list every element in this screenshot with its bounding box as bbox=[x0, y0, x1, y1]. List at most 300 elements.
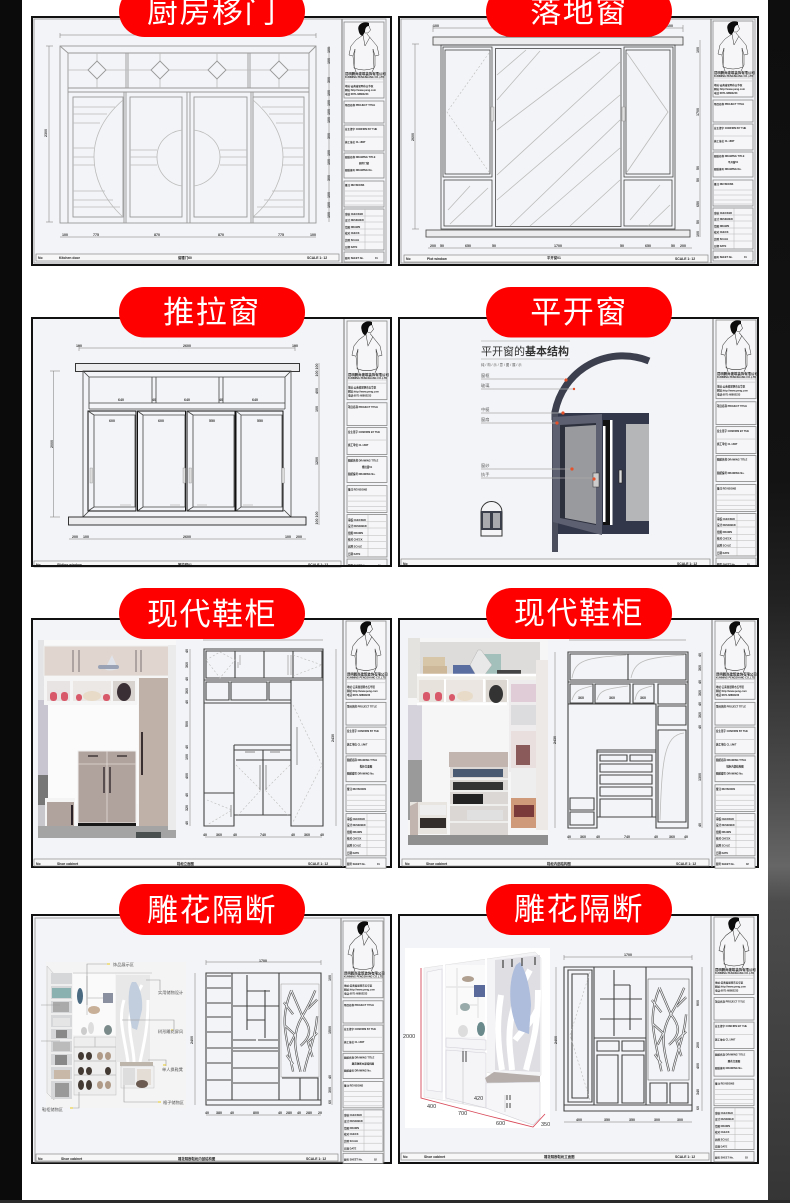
drawing footer text: 鞋柜内部结构图 bbox=[547, 861, 571, 866]
elevation drawing: shoe cabinet: 360 bbox=[185, 662, 189, 668]
title block: 电话:0871-68882233 bbox=[717, 393, 741, 397]
interior drawing: partition: 40 bbox=[230, 1111, 234, 1115]
title block: 设计 DESIGNED bbox=[715, 1117, 734, 1121]
part labels with leader lines: 窗扇 bbox=[481, 416, 489, 423]
elevation drawing: sliding door: 100 bbox=[62, 233, 68, 237]
elevation drawing: window: 2600 bbox=[411, 133, 415, 141]
elevation drawing: sliding window: 1200 bbox=[315, 457, 319, 465]
drawing footer text: Kitchen door bbox=[59, 256, 81, 260]
elevation drawing: window: 100 bbox=[667, 24, 673, 28]
title block: KUNMING PENGSHANG CO.,LTD bbox=[714, 75, 753, 78]
elevation drawing: window: 100 bbox=[696, 231, 700, 237]
elevation drawing: shoe cabinet: 740 bbox=[260, 833, 266, 837]
title block: 网址:http://www.peng.com bbox=[348, 389, 380, 393]
product photo with dimensions: 350 bbox=[541, 1122, 550, 1128]
drawing footer text bbox=[36, 861, 328, 866]
title block: 雕花立面图 bbox=[728, 1059, 741, 1063]
elevation drawing: sliding door bbox=[44, 33, 331, 237]
title block: 校对 CHECK bbox=[344, 1132, 359, 1136]
title block: 图纸名称 DRAWING TITLE bbox=[717, 458, 748, 462]
elevation drawing: sliding window: 100 bbox=[76, 344, 82, 348]
title block bbox=[713, 21, 755, 261]
interior drawing: partition: 380 bbox=[216, 1111, 222, 1115]
title block: 图纸名称 DRAWING TITLE bbox=[345, 155, 376, 159]
elevation drawing: sliding door: 775 bbox=[278, 233, 284, 237]
elevation drawing: shoe cabinet: 500 bbox=[185, 721, 189, 727]
photo: open shoe cabinet bbox=[408, 638, 548, 845]
elevation drawing: sliding door: 100 bbox=[327, 100, 331, 106]
title block: 比例 SCALE bbox=[717, 544, 731, 548]
part labels with leader lines bbox=[481, 372, 596, 481]
elevation drawing: window: 50 bbox=[620, 244, 624, 248]
elevation drawing: window: 50 bbox=[696, 166, 700, 170]
title block: 业主签字 CONFIRM BY THE bbox=[714, 126, 747, 130]
interior drawing: shoe cabinet: 360 bbox=[698, 690, 702, 696]
title block: 图纸名称 DRAWING TITLE bbox=[344, 1055, 375, 1059]
title block: 施工单位 CL.UNIT bbox=[717, 442, 738, 446]
elevation drawing: sliding door: 100 bbox=[327, 109, 331, 115]
interior drawing: shoe cabinet: 40 bbox=[698, 653, 702, 657]
title block: 绘图 DRAWN bbox=[717, 530, 732, 534]
elevation drawing: partition: 300 bbox=[677, 1118, 683, 1122]
title block: 图纸编号 DRAWING No. bbox=[344, 1068, 372, 1072]
drawing footer text: SCALE 1: 12 bbox=[677, 562, 697, 566]
elevation drawing: shoe cabinet: 40 bbox=[185, 649, 189, 653]
elevation drawing: window: 100 bbox=[433, 24, 439, 28]
elevation drawing: sliding door: 100 bbox=[310, 233, 316, 237]
title block: 鞋柜立面图 bbox=[360, 764, 373, 768]
elevation drawing: sliding window: 2600 bbox=[183, 344, 191, 348]
title block: 图纸编号 DRAWING No. bbox=[716, 771, 744, 775]
elevation drawing: shoe cabinet: 360 bbox=[185, 688, 189, 694]
elevation drawing: sliding door: 775 bbox=[93, 233, 99, 237]
title block: 业主签字 CONFIRM BY THE bbox=[345, 127, 378, 131]
elevation drawing: partition: 300 bbox=[654, 1118, 660, 1122]
elevation drawing: sliding window: 100 bbox=[285, 535, 291, 539]
interior drawing: shoe cabinet: 360 bbox=[580, 835, 586, 839]
title block: 项目名称 PROJECT TITLE bbox=[345, 103, 375, 107]
title block: 01 bbox=[744, 256, 747, 259]
drawing footer text: 窗腰门60 bbox=[178, 255, 192, 260]
right dark gradient strip bbox=[768, 0, 790, 1203]
drawing footer text: 鞋柜立面图 bbox=[177, 861, 195, 866]
interior drawing: partition: 40 bbox=[205, 1111, 209, 1115]
elevation drawing: sliding door: 100 bbox=[327, 90, 331, 96]
title block: 备注 REVISIONS bbox=[347, 787, 366, 791]
elevation drawing: window: 50 bbox=[696, 178, 700, 182]
title block: 平开窗01 bbox=[728, 160, 739, 164]
title block: 网址:http://www.peng.com bbox=[716, 689, 747, 693]
feature callouts: 饰品展示区 bbox=[113, 961, 134, 968]
elevation drawing: window: 200 bbox=[680, 244, 686, 248]
elevation drawing: window: 1700 bbox=[696, 108, 700, 116]
heading pill: 平开窗 bbox=[486, 287, 672, 338]
title block: 01 bbox=[378, 564, 381, 567]
product photo with dimensions: 420 bbox=[474, 1096, 483, 1102]
elevation drawing: shoe cabinet: 2430 bbox=[331, 734, 335, 742]
elevation drawing: sliding window: 100 bbox=[292, 344, 298, 348]
elevation drawing: sliding window: 100 100 bbox=[315, 364, 319, 376]
product photo with dimensions: 700 bbox=[458, 1111, 467, 1117]
drawing footer text: No bbox=[38, 1157, 43, 1161]
title block: 校对 CHECK bbox=[348, 537, 363, 541]
title block: 审核 CHECKED bbox=[715, 1111, 733, 1115]
elevation drawing: sliding door: 100 bbox=[327, 202, 331, 208]
title block: 项目名称 PROJECT TITLE bbox=[347, 704, 377, 709]
panel: casement window bbox=[399, 318, 758, 568]
title block: 设计 DESIGNED bbox=[716, 823, 735, 827]
title block: 厨房门窗 bbox=[359, 161, 369, 165]
interior drawing: shoe cabinet: 40 bbox=[684, 835, 688, 839]
drawing footer text: No bbox=[405, 862, 410, 866]
interior drawing: shoe cabinet bbox=[553, 640, 702, 839]
part labels with leader lines: 玻璃 bbox=[481, 382, 489, 389]
elevation drawing: shoe cabinet: 320 bbox=[185, 805, 189, 811]
title block: 施工单位 CL.UNIT bbox=[714, 139, 735, 143]
drawing footer text: 推拉窗01 bbox=[178, 562, 192, 567]
title block: 图纸名称 DRAWING TITLE bbox=[715, 1053, 746, 1057]
elevation drawing: shoe cabinet: 40 bbox=[185, 793, 189, 797]
title block: 图号 SHEET No. bbox=[348, 563, 367, 567]
title block: 设计 DESIGNED bbox=[345, 218, 364, 222]
elevation drawing: window: 650 bbox=[645, 244, 651, 248]
heading pill: 推拉窗: 推拉窗 bbox=[163, 295, 261, 330]
elevation drawing: sliding door: 870 bbox=[218, 233, 224, 237]
interior drawing: partition: 280 bbox=[306, 1111, 312, 1115]
elevation drawing: window bbox=[411, 24, 700, 248]
drawing footer text: 平开窗01 bbox=[547, 255, 561, 260]
title block: 业主签字 CONFIRM BY THE bbox=[716, 729, 748, 733]
elevation drawing: sliding window: 200 bbox=[72, 535, 78, 539]
title block: KUNMING PENGSHANG CO.,LTD bbox=[348, 377, 387, 380]
interior drawing: partition: 2400 bbox=[190, 1036, 194, 1044]
photo: shoe cabinet bbox=[38, 640, 176, 838]
elevation drawing: shoe cabinet: 40 bbox=[185, 821, 189, 825]
elevation drawing: sliding door: 100 bbox=[327, 58, 331, 64]
heading pill: 厨房移门 bbox=[119, 0, 305, 37]
drawing footer text: SCALE 1: 12 bbox=[308, 862, 328, 866]
interior drawing: partition: 800 bbox=[253, 1111, 259, 1115]
feature callouts: 格子储物区 bbox=[163, 1099, 184, 1106]
elevation drawing: shoe cabinet: 40 bbox=[185, 700, 189, 704]
interior drawing: shoe cabinet: 40 bbox=[596, 835, 600, 839]
title block: 图纸名称 DRAWING TITLE bbox=[348, 459, 379, 463]
drawing footer text: 雕花隔断鞋柜立面图 bbox=[544, 1154, 575, 1159]
drawing footer text: Shoe cabinet bbox=[57, 862, 79, 866]
left black strip bbox=[0, 0, 22, 1203]
interior drawing: partition: 1700 bbox=[259, 959, 267, 963]
drawing footer text: No bbox=[36, 862, 41, 866]
elevation drawing: shoe cabinet: 40 bbox=[291, 833, 295, 837]
title block: 施工单位 CL.UNIT bbox=[345, 140, 366, 144]
title block: 审核 CHECKED bbox=[344, 1113, 362, 1117]
title block: 校对 CHECK bbox=[347, 836, 362, 840]
elevation drawing: window: 50 bbox=[492, 244, 496, 248]
title block: 昆明鹏尚建筑装饰有限公司 bbox=[716, 672, 757, 677]
interior drawing: partition: 40 bbox=[278, 1111, 282, 1115]
drawing footer text: SCALE 1: 12 bbox=[676, 862, 696, 866]
elevation drawing: window: 50 bbox=[671, 244, 675, 248]
drawing footer text: No bbox=[403, 562, 408, 566]
title block: 昆明鹏尚建筑装饰有限公司 bbox=[347, 672, 388, 677]
elevation drawing: partition: 200 bbox=[696, 1042, 700, 1048]
title block: 图纸编号 DRAWING No. bbox=[345, 168, 373, 172]
elevation drawing: partition bbox=[554, 953, 702, 1122]
interior drawing: partition: 300 bbox=[328, 1087, 332, 1093]
title block: 项目名称 PROJECT TITLE bbox=[348, 405, 378, 409]
drawing footer text: Shoe cabinet bbox=[61, 1157, 83, 1161]
title block: 图号 SHEET No. bbox=[717, 562, 736, 566]
title block: 日期 DATE bbox=[717, 551, 730, 555]
title block: 绘图 DRAWN bbox=[345, 225, 360, 229]
elevation drawing: shoe cabinet: 400 bbox=[185, 773, 189, 779]
title block: 设计 DESIGNED bbox=[344, 1119, 363, 1123]
part labels with leader lines: 窗纱 bbox=[481, 462, 489, 469]
title block: 比例 SCALE bbox=[347, 844, 361, 848]
drawing footer text: Shoe cabinet bbox=[426, 862, 448, 866]
product illustration: partition cabinet bbox=[46, 962, 186, 1108]
interior drawing: shoe cabinet: 40 bbox=[698, 725, 702, 729]
product photo with dimensions bbox=[403, 948, 550, 1128]
title block: 图号 SHEET No. bbox=[714, 255, 733, 259]
drawing footer text: Plot window bbox=[427, 257, 447, 261]
title block: 设计 DESIGNED bbox=[347, 823, 366, 827]
title block: 校对 CHECK bbox=[714, 230, 729, 234]
feature callouts: 实用储物设计 bbox=[158, 989, 183, 996]
interior drawing: partition: 1500 bbox=[328, 1026, 332, 1034]
elevation drawing: sliding door: 100 bbox=[327, 192, 331, 198]
title block: 备注 REVISIONS bbox=[714, 182, 734, 186]
title block: 项目名称 PROJECT TITLE bbox=[344, 1003, 374, 1007]
feature callouts: 鞋柜储物区 bbox=[42, 1106, 63, 1113]
product photo with dimensions: 600 bbox=[496, 1121, 505, 1127]
title block: 比例 SCALE bbox=[345, 238, 360, 242]
elevation drawing: sliding window: 40 bbox=[219, 398, 223, 402]
feature callouts: 树形雕花屏风 bbox=[158, 1028, 184, 1035]
feature callouts bbox=[41, 961, 184, 1113]
panel: floor-to-ceiling window bbox=[399, 17, 758, 265]
elevation drawing: partition: 350 bbox=[604, 1118, 610, 1122]
title block: 03 bbox=[745, 1157, 748, 1160]
title block: 网址:http://www.peng.com bbox=[717, 388, 749, 392]
elevation drawing: sliding door: 100 bbox=[327, 150, 331, 156]
title block: 业主签字 CONFIRM BY THE bbox=[715, 1024, 747, 1028]
title block: 绘图 DRAWN bbox=[348, 531, 363, 535]
title block: 审核 CHECKED bbox=[714, 211, 732, 215]
title block bbox=[347, 321, 389, 569]
elevation drawing: partition: 340 bbox=[696, 1089, 700, 1095]
elevation drawing: window: 1700 bbox=[554, 244, 562, 248]
title block: 业主签字 CONFIRM BY THE bbox=[717, 429, 749, 433]
title block: 昆明鹏尚建筑装饰有限公司 bbox=[348, 372, 389, 377]
title block: 校对 CHECK bbox=[716, 836, 731, 840]
title block: 审核 CHECKED bbox=[716, 817, 734, 821]
elevation drawing: sliding window: 550 bbox=[209, 419, 215, 423]
heading pill: 推拉窗 bbox=[119, 287, 305, 338]
product photo with dimensions: 2000 bbox=[403, 1034, 415, 1040]
title block: 图纸编号 DRAWING No. bbox=[348, 472, 376, 476]
title block: 备注 REVISIONS bbox=[715, 1081, 735, 1085]
title block: 地址:云南省昆明市五华区 bbox=[714, 83, 743, 87]
title block: 雕花隔断内部结构图 bbox=[352, 1061, 375, 1065]
title block: 01 bbox=[377, 863, 380, 866]
title block: 电话:0871-68882233 bbox=[348, 394, 372, 398]
elevation drawing: partition: 1700 bbox=[624, 953, 632, 957]
title block: 绘图 DRAWN bbox=[347, 830, 362, 834]
title block: KUNMING PENGSHANG CO.,LTD bbox=[347, 677, 386, 680]
title block bbox=[344, 22, 386, 262]
interior drawing: shoe cabinet: 40 bbox=[698, 702, 702, 706]
title block: 图纸名称 DRAWING TITLE bbox=[716, 758, 746, 762]
elevation drawing: sliding window bbox=[50, 344, 319, 539]
title block: 审核 CHECKED bbox=[348, 518, 366, 522]
elevation drawing: sliding window: 2600 bbox=[183, 535, 191, 539]
heading pill: 雕花隔断 left bbox=[119, 884, 305, 935]
title block bbox=[714, 917, 756, 1162]
drawing footer text: SCALE 1: 12 bbox=[307, 256, 327, 260]
title block: 施工单位 CL.UNIT bbox=[347, 743, 368, 747]
panel: sliding window bbox=[32, 318, 391, 569]
title block: 绘图 DRAWN bbox=[716, 830, 731, 834]
title block: 备注 REVISIONS bbox=[344, 1084, 364, 1088]
title block: 网址:http://www.peng.com bbox=[714, 87, 746, 91]
title block: 绘图 DRAWN bbox=[714, 224, 729, 228]
elevation drawing: partition: 400 bbox=[576, 1118, 582, 1122]
elevation drawing: partition: 60 bbox=[696, 1106, 700, 1110]
title block: 比例 SCALE bbox=[715, 1137, 729, 1141]
title block: 日期 DATE bbox=[345, 245, 358, 249]
title block: 图纸名称 DRAWING TITLE bbox=[347, 758, 377, 762]
title block: 施工单位 CL.UNIT bbox=[344, 1040, 365, 1044]
title block: 01 bbox=[747, 563, 750, 566]
interior drawing: partition: 280 bbox=[286, 1111, 292, 1115]
elevation drawing: sliding window: 200 bbox=[296, 535, 302, 539]
title block: 审核 CHECKED bbox=[347, 817, 365, 821]
title block: 业主签字 CONFIRM BY THE bbox=[344, 1027, 376, 1031]
elevation drawing: sliding door: 100 bbox=[327, 159, 331, 165]
heading pill: 平开窗: 平开窗 bbox=[530, 295, 628, 330]
small window thumbnail bbox=[481, 502, 502, 536]
title block: 图号 SHEET No. bbox=[345, 256, 364, 260]
title block: 日期 DATE bbox=[344, 1146, 357, 1150]
interior drawing: shoe cabinet: 40 bbox=[654, 835, 658, 839]
elevation drawing: window: 650 bbox=[465, 244, 471, 248]
title block: 图纸名称 DRAWING TITLE bbox=[714, 154, 745, 158]
elevation drawing: shoe cabinet: 40 bbox=[233, 833, 237, 837]
elevation drawing: sliding door: 100 bbox=[327, 47, 331, 53]
heading pill: 雕花隔断 right bbox=[486, 884, 672, 935]
elevation drawing: shoe cabinet bbox=[185, 640, 336, 837]
heading pill: 现代鞋柜 left: 现代鞋柜 bbox=[147, 597, 277, 632]
elevation drawing: window: 50 bbox=[696, 220, 700, 224]
elevation drawing: sliding door: 2300 bbox=[44, 129, 48, 137]
panel: modern shoe cabinet interior bbox=[399, 619, 758, 868]
casement structure heading: 平开窗的基本结构 bbox=[481, 344, 569, 358]
title block: 图号 SHEET No. bbox=[716, 862, 735, 866]
title block: 鞋柜内部结构图 bbox=[726, 764, 744, 768]
drawing footer text bbox=[38, 255, 327, 260]
panel: carved partition elevation bbox=[399, 915, 758, 1163]
drawing footer text bbox=[403, 1154, 695, 1159]
title block: 比例 SCALE bbox=[344, 1139, 358, 1143]
interior drawing: partition: 40 bbox=[297, 1111, 301, 1115]
casement structure heading: 纯 / 构 / 示 / 意 / 图 / 展 / 示 bbox=[481, 362, 522, 367]
title block: 昆明鹏尚建筑装饰有限公司 bbox=[714, 70, 755, 75]
interior drawing: shoe cabinet: 360 bbox=[698, 665, 702, 671]
drawing footer text: SCALE 1: 12 bbox=[308, 563, 328, 567]
elevation drawing: shoe cabinet: 360 bbox=[304, 833, 310, 837]
elevation drawing: shoe cabinet: 40 bbox=[320, 833, 324, 837]
title block: 日期 DATE bbox=[347, 851, 360, 855]
elevation drawing: window: 650 bbox=[696, 201, 700, 207]
title block: 昆明鹏尚建筑装饰有限公司 bbox=[344, 971, 385, 976]
title block: KUNMING PENGSHANG CO.,LTD bbox=[715, 972, 754, 975]
title block: 校对 CHECK bbox=[717, 536, 732, 540]
feature callouts: 单人换鞋凳 bbox=[162, 1066, 184, 1073]
title block: 02 bbox=[746, 863, 749, 866]
interior drawing: shoe cabinet: 1300 bbox=[698, 773, 702, 781]
elevation drawing: sliding window: 600 bbox=[109, 419, 115, 423]
title block: 图号 SHEET No. bbox=[344, 1157, 363, 1161]
title block: 日期 DATE bbox=[715, 1144, 728, 1149]
title block: 备注 REVISIONS bbox=[716, 787, 735, 791]
bottom dark strip bbox=[0, 1200, 790, 1203]
title block: 昆明鹏尚建筑装饰有限公司 bbox=[717, 371, 758, 376]
elevation drawing: sliding door: 870 bbox=[154, 233, 160, 237]
heading pill: 现代鞋柜 right: 现代鞋柜 bbox=[514, 596, 644, 631]
title block: 日期 DATE bbox=[714, 244, 727, 248]
title block: 图纸编号 DRAWING No. bbox=[347, 771, 375, 775]
title block bbox=[346, 621, 388, 868]
elevation drawing: shoe cabinet: 40 bbox=[185, 745, 189, 749]
title block: 地址:云南省昆明市五华区 bbox=[717, 384, 746, 388]
drawing footer text: No bbox=[406, 257, 411, 261]
title block: KUNMING PENGSHANG CO.,LTD bbox=[717, 376, 756, 379]
heading pill: 现代鞋柜 right bbox=[486, 588, 672, 639]
elevation drawing: sliding window: 550 bbox=[257, 419, 263, 423]
interior drawing: partition: 20 bbox=[318, 1111, 322, 1115]
interior drawing: shoe cabinet: 360 bbox=[640, 696, 646, 700]
drawing footer text: 雕花隔断鞋柜内部结构图 bbox=[178, 1156, 216, 1161]
title block: 地址:云南省昆明市五华区 bbox=[716, 685, 745, 689]
drawing footer text bbox=[406, 255, 695, 261]
part labels with leader lines: 中梃 bbox=[481, 406, 490, 413]
interior drawing: partition: 60 bbox=[328, 1100, 332, 1104]
elevation drawing: sliding door: 100 bbox=[327, 117, 331, 123]
title block: 01 bbox=[375, 257, 378, 260]
title block: 备注 REVISIONS bbox=[717, 487, 737, 491]
title block bbox=[343, 921, 385, 1163]
interior drawing: shoe cabinet: 360 bbox=[609, 696, 615, 700]
drawing footer text bbox=[38, 1156, 326, 1161]
part labels with leader lines: 窗框 bbox=[481, 372, 490, 379]
title block: 项目名称 PROJECT TITLE bbox=[715, 1000, 745, 1004]
elevation drawing: sliding window: 640 bbox=[184, 398, 190, 402]
interior drawing: partition bbox=[190, 959, 332, 1115]
heading pill: 雕花隔断 left: 雕花隔断 bbox=[147, 893, 277, 928]
interior drawing: shoe cabinet: 40 bbox=[698, 680, 702, 684]
title block: 施工单位 CL.UNIT bbox=[716, 743, 737, 747]
title block: 02 bbox=[374, 1158, 377, 1161]
drawing footer text bbox=[405, 861, 696, 866]
title block: KUNMING PENGSHANG CO.,LTD bbox=[716, 677, 755, 680]
title block: 业主签字 CONFIRM BY THE bbox=[347, 729, 379, 733]
title block: 电话:0871-68882233 bbox=[716, 693, 740, 697]
title block: 项目名称 PROJECT TITLE bbox=[717, 404, 747, 408]
title block: 图号 SHEET No. bbox=[715, 1156, 734, 1160]
elevation drawing: partition: 350 bbox=[629, 1118, 635, 1122]
title block: 地址:云南省昆明市五华区 bbox=[348, 385, 377, 389]
